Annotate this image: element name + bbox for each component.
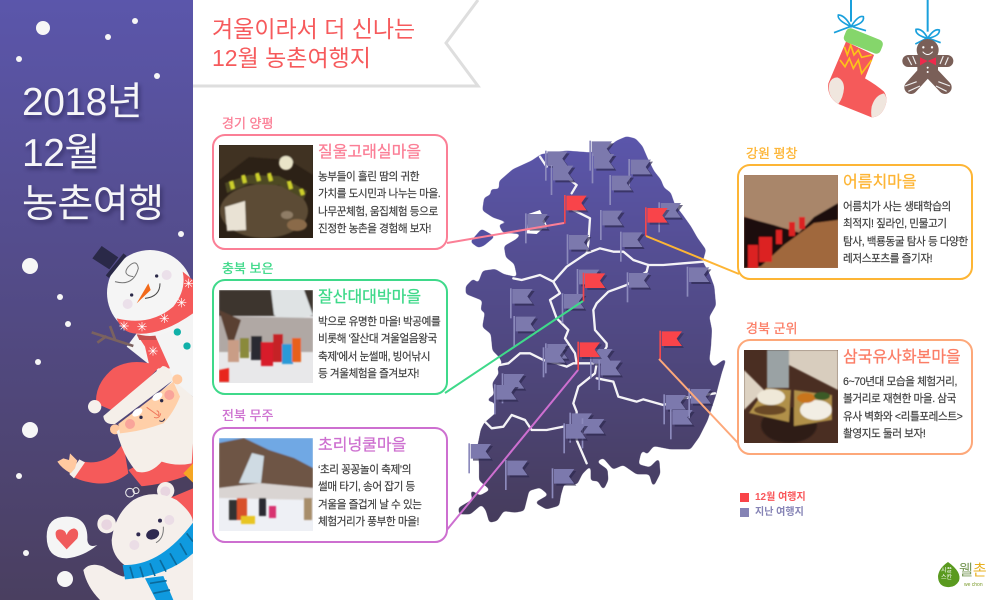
panel: Jiluri Goraesil village	[212, 134, 448, 250]
flag: Boeun	[583, 273, 607, 301]
illustration: christmas characters	[47, 246, 193, 600]
logo: 스칸	[941, 575, 952, 581]
description: ‘초리 꽁꽁놀이 축제’의	[318, 464, 411, 476]
label: Gangwon Pyeongchang: 강원 평창	[746, 146, 797, 161]
village name: 삼국유사화본마을	[843, 349, 961, 366]
village name: 질울고래실마을	[318, 144, 421, 161]
description: 어름치가 사는 생태학습의	[843, 201, 951, 213]
description: 가치를 도시민과 나누는 마을.	[318, 188, 440, 200]
main heading	[22, 81, 164, 226]
village name: 어름치마을	[843, 174, 917, 191]
legend text: previous destinations: 지난 여행지	[755, 507, 804, 518]
description: 레저스포츠를 즐기자!	[843, 253, 932, 265]
description: 겨울을 즐겁게 날 수 있는	[318, 499, 422, 511]
icon: speech bubble with heart	[47, 517, 97, 558]
main heading: 농촌여행	[22, 183, 164, 226]
logo: 웰촌	[959, 562, 987, 579]
leader line: pink	[447, 223, 564, 243]
panel: Chori vine village	[212, 427, 448, 543]
description: 촬영지도 둘러 보자!	[843, 428, 925, 440]
regional borders	[485, 157, 715, 463]
description	[843, 200, 968, 265]
icon: polar bear	[83, 482, 193, 600]
title banner outline	[193, 0, 478, 86]
photo: cave gathering	[219, 145, 313, 238]
legend text: December destinations: 12월 여행지	[755, 492, 806, 503]
subtitle: 12월 농촌여행지	[212, 45, 371, 71]
label: Chungbuk Boeun: 충북 보은	[222, 261, 273, 276]
legend swatch: December	[740, 493, 749, 502]
photo: cave exploration	[744, 175, 838, 268]
panel: Samguk Yusa Hwabon village	[737, 339, 973, 455]
flag: Pyeongchang	[645, 207, 670, 236]
logo	[941, 562, 987, 588]
description: 박으로 유명한 마을! 박공예를	[318, 316, 440, 328]
photo: lunchbox on stove table	[744, 350, 838, 443]
description: 축제'에서 눈썰매, 빙어낚시	[318, 351, 430, 363]
flag: Muju	[577, 342, 602, 370]
label: Jeonbuk Muju: 전북 무주	[222, 408, 273, 423]
logo leaf	[938, 562, 960, 587]
description: 체험거리가 풍부한 마을!	[318, 516, 419, 528]
description: 진정한 농촌을 경험해 보자!	[318, 223, 431, 235]
description: 농부들이 흘린 땀의 귀한	[318, 171, 419, 183]
village name: 초리넝쿨마을	[318, 437, 406, 454]
leader line: yellow	[646, 236, 739, 274]
main heading: 12월	[22, 132, 100, 175]
panel: Jalsan Daedaebak village	[212, 279, 448, 395]
description: 썰매 타기, 송어 잡기 등	[318, 481, 415, 493]
photo: ice festival group	[219, 290, 313, 383]
legend swatch: previous	[740, 508, 749, 517]
village name: 잘산대대박마을	[318, 289, 421, 306]
panel: Eoreumchi village	[737, 164, 973, 280]
map of South Korea	[459, 137, 725, 522]
icon: stocking	[828, 0, 886, 117]
label: Gyeonggi Yangpyeong: 경기 양평	[222, 116, 273, 131]
sidebar background	[0, 0, 193, 600]
label: Gyeongbuk Gunwi: 경북 군위	[746, 321, 797, 336]
logo: 시끌	[941, 568, 952, 574]
description: 등 겨울체험을 즐겨보자!	[318, 368, 419, 380]
description: 최적지! 짚라인, 민물고기	[843, 218, 947, 230]
logo: we chon	[964, 582, 983, 588]
leader line: green	[445, 301, 583, 393]
description: 유사 벽화와 <리틀포레스트>	[843, 411, 962, 423]
description: 볼거리로 재현한 마을. 삼국	[843, 393, 956, 405]
description: 6~70년대 모습을 체험거리,	[843, 376, 957, 388]
description: 탐사, 백룡동굴 탐사 등 다양한	[843, 236, 968, 248]
description: 나무꾼체험, 움집체험 등으로	[318, 206, 438, 218]
flag: Gunwi	[659, 331, 684, 359]
subtitle: 겨울이라서 더 신나는	[212, 16, 415, 42]
photo: frozen waterfall and snow field	[219, 438, 313, 531]
icon: snowman	[92, 246, 193, 397]
flag: Yangpyeong	[564, 195, 589, 224]
description	[318, 464, 422, 528]
previous trip flags (gray)	[468, 141, 713, 498]
description: 비롯해 '잘산대 겨울얼음왕국	[318, 333, 437, 345]
description	[318, 316, 440, 380]
leader line: orange	[659, 359, 738, 443]
leader line: purple	[446, 370, 578, 531]
subtitle	[212, 16, 415, 71]
main heading: 2018년	[22, 81, 142, 124]
description	[318, 170, 440, 235]
icon: gingerbread man	[905, 0, 950, 91]
icon: santa	[57, 362, 193, 520]
description	[843, 376, 962, 440]
